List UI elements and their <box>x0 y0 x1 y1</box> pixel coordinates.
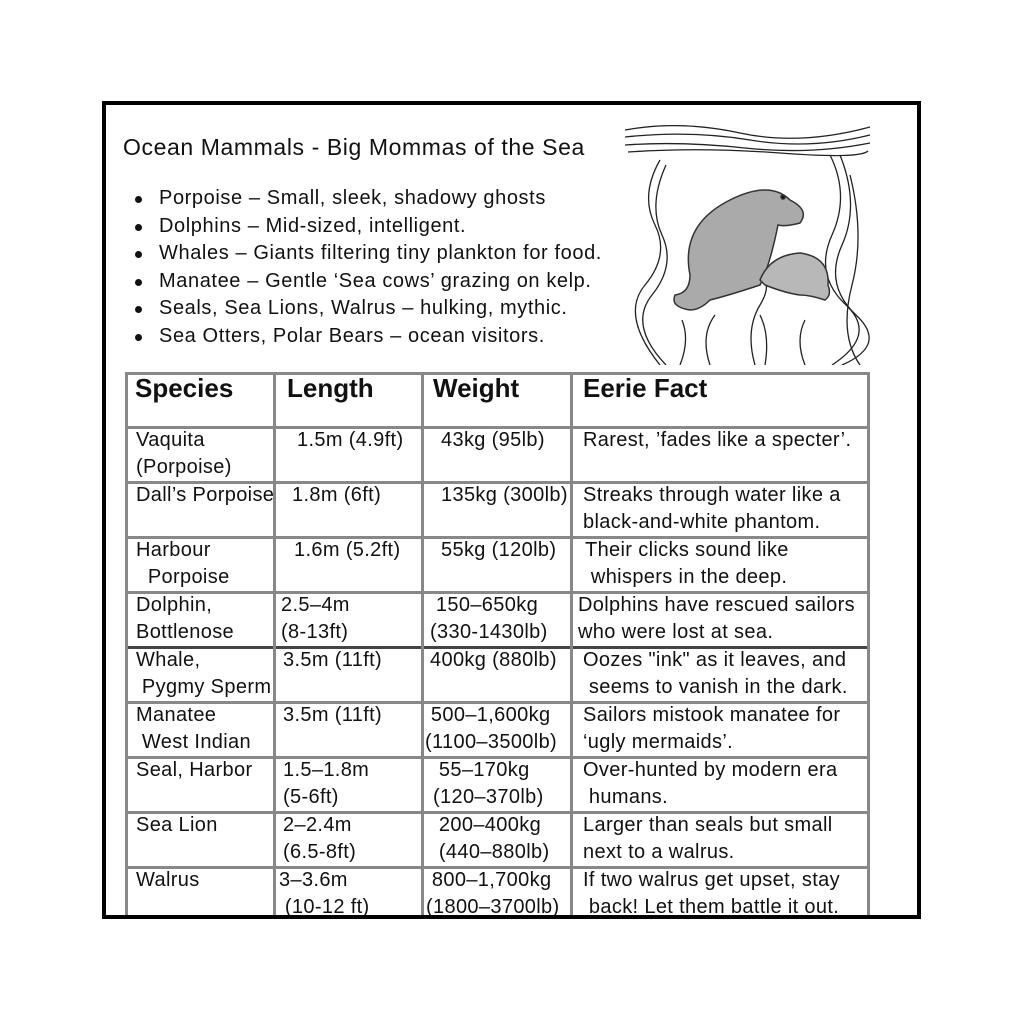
table: (8-13ft) <box>281 621 348 643</box>
table: 400kg (880lb) <box>430 649 557 671</box>
rows: Vaquita <box>136 429 205 451</box>
table: If two walrus get upset, stay <box>583 869 840 891</box>
table: Sea Lion <box>136 814 218 836</box>
table: Porpoise <box>148 566 230 588</box>
table: (120–370lb) <box>433 786 544 808</box>
table: Seal, Harbor <box>136 759 252 781</box>
table: Dolphins have rescued sailors <box>578 594 855 616</box>
table: 2.5–4m <box>281 594 350 616</box>
table: (1100–3500lb) <box>425 731 557 753</box>
table: seems to vanish in the dark. <box>589 676 848 698</box>
table: next to a walrus. <box>583 841 735 863</box>
bottom frame edge <box>102 915 921 919</box>
table: 3.5m (11ft) <box>283 704 382 726</box>
table: Oozes "ink" as it leaves, and <box>583 649 846 671</box>
table: Eerie Fact <box>583 373 707 403</box>
table: 1.5–1.8m <box>283 759 369 781</box>
table: Manatee <box>136 704 216 726</box>
bullet list: Whales – Giants filtering tiny plankton for food. <box>159 242 602 264</box>
table: 55–170kg <box>439 759 530 781</box>
bullet list: Manatee – Gentle ‘Sea cows’ grazing on kelp. <box>159 270 592 292</box>
bullet list: Seals, Sea Lions, Walrus – hulking, mythic. <box>159 297 568 319</box>
table: 800–1,700kg <box>432 869 551 891</box>
table: whispers in the deep. <box>591 566 787 588</box>
table: humans. <box>589 786 668 808</box>
table: Sailors mistook manatee for <box>583 704 840 726</box>
table: 1.6m (5.2ft) <box>294 539 400 561</box>
table: Pygmy Sperm <box>142 676 271 698</box>
table: Dall’s Porpoise <box>136 484 274 506</box>
table: Harbour <box>136 539 211 561</box>
table: 150–650kg <box>436 594 538 616</box>
table: ‘ugly mermaids’. <box>583 731 733 753</box>
table: 1.5m (4.9ft) <box>297 429 403 451</box>
table: (330-1430lb) <box>430 621 548 643</box>
table: 3–3.6m <box>279 869 348 891</box>
rows <box>136 429 232 478</box>
table: 43kg (95lb) <box>441 429 545 451</box>
table: (5-6ft) <box>283 786 339 808</box>
bullet list <box>135 187 602 347</box>
illustration: manatees with kelp <box>624 125 870 365</box>
bullet list: Porpoise – Small, sleek, shadowy ghosts <box>159 187 546 209</box>
table: back! Let them battle it out. <box>589 896 839 918</box>
table: Over-hunted by modern era <box>583 759 837 781</box>
table: 135kg (300lb) <box>441 484 568 506</box>
table: 1.8m (6ft) <box>292 484 381 506</box>
table: Their clicks sound like <box>585 539 789 561</box>
table: Bottlenose <box>136 621 234 643</box>
frame <box>102 101 921 920</box>
table: Whale, <box>136 649 200 671</box>
table: West Indian <box>142 731 251 753</box>
table: 2–2.4m <box>283 814 352 836</box>
table: 500–1,600kg <box>431 704 550 726</box>
table: Dolphin, <box>136 594 212 616</box>
table: (1800–3700lb) <box>426 896 560 918</box>
bullet list: Sea Otters, Polar Bears – ocean visitors. <box>159 325 545 347</box>
table: (440–880lb) <box>439 841 550 863</box>
rows: (Porpoise) <box>136 456 232 478</box>
table: black-and-white phantom. <box>583 511 820 533</box>
table: 3.5m (11ft) <box>283 649 382 671</box>
title: Ocean Mammals - Big Mommas of the Sea <box>123 134 585 160</box>
table: Larger than seals but small <box>583 814 833 836</box>
table: (10-12 ft) <box>285 896 370 918</box>
table: 200–400kg <box>439 814 541 836</box>
table: Walrus <box>136 869 200 891</box>
table: Streaks through water like a <box>583 484 841 506</box>
table: who were lost at sea. <box>578 621 773 643</box>
table: Weight <box>433 373 519 403</box>
table: (6.5-8ft) <box>283 841 356 863</box>
bullet list: Dolphins – Mid-sized, intelligent. <box>159 215 466 237</box>
table: Length <box>287 373 374 403</box>
table header: Species <box>135 373 233 403</box>
table: Rarest, ’fades like a specter’. <box>583 429 851 451</box>
table: 55kg (120lb) <box>441 539 556 561</box>
